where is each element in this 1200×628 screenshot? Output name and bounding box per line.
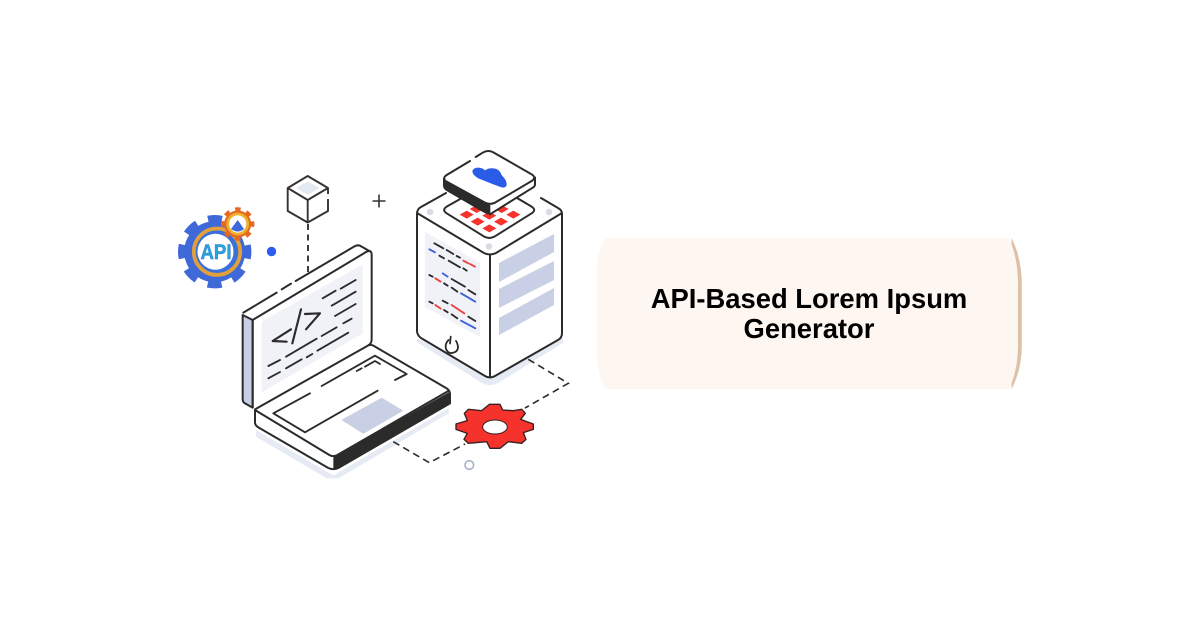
dashed connector path — [393, 359, 568, 463]
cloud platform — [443, 151, 535, 214]
icon: API gear badge — [182, 209, 252, 285]
laptop base — [255, 345, 450, 469]
icon: blue dot — [267, 247, 276, 256]
touchpad — [342, 398, 402, 433]
icon: cube with dashed connector — [288, 176, 328, 279]
server code lines — [429, 243, 475, 328]
icon: cloud — [472, 168, 507, 188]
code symbol — [273, 309, 320, 343]
icon: plus sign — [372, 194, 386, 208]
keyboard outline — [273, 356, 407, 432]
icon: red gear — [456, 404, 533, 448]
laptop screen — [243, 245, 372, 410]
icon: API gear badge: API — [200, 241, 232, 264]
panel: title card — [597, 238, 1022, 389]
top slot with red chips — [444, 185, 534, 238]
title: Generator — [744, 313, 875, 344]
laptop shadow — [256, 408, 449, 478]
icon: small ring — [465, 461, 474, 469]
title: API-Based Lorem Ipsum — [651, 283, 967, 314]
server body — [417, 170, 562, 378]
screen text lines — [268, 280, 356, 378]
server tower illustration — [417, 151, 563, 385]
server shadow — [417, 338, 563, 385]
laptop illustration — [243, 245, 450, 478]
icon: power button — [446, 337, 458, 353]
